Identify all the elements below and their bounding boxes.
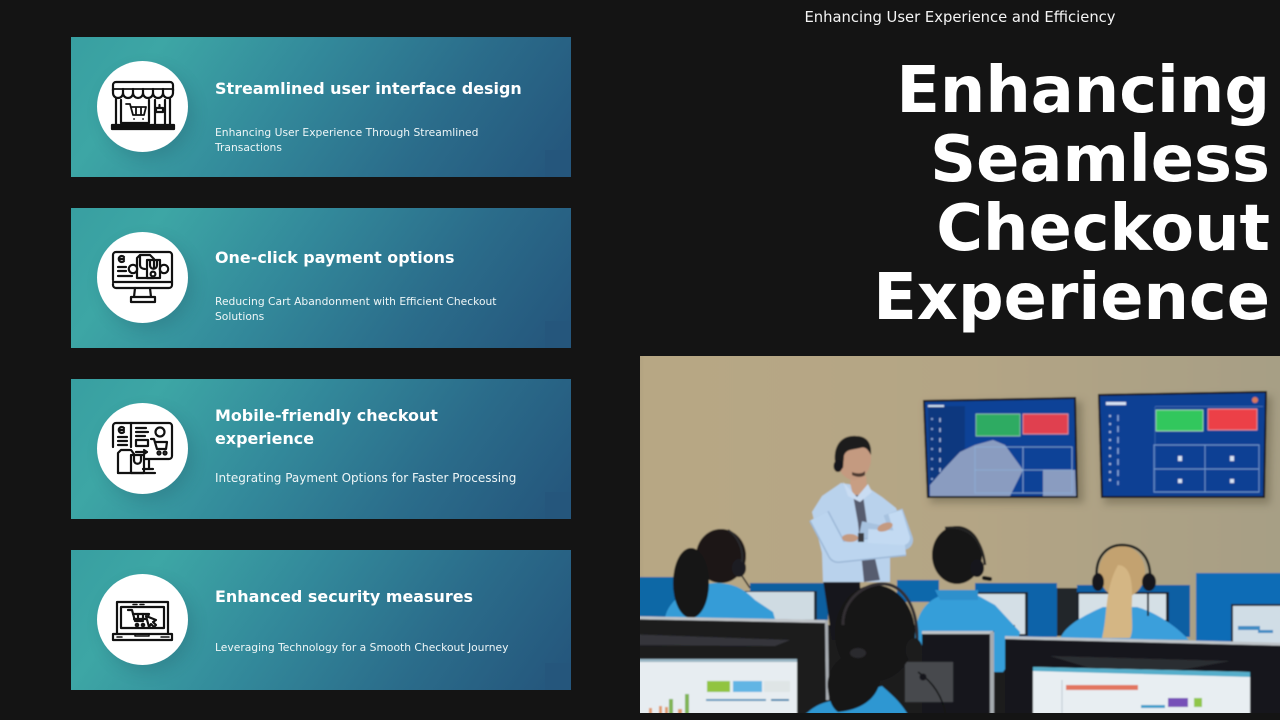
icon: storefront with cart (97, 61, 188, 152)
desk shadow area (825, 625, 1015, 720)
seated agent left (665, 529, 775, 619)
heading: One-click payment options (215, 248, 454, 267)
panel: mobile-friendly checkout experience (71, 379, 571, 519)
subtitle: Enhancing User Experience and Efficiency (804, 9, 1116, 26)
heading: Streamlined user interface design (215, 79, 522, 98)
description: Integrating Payment Options for Faster Processing (215, 471, 516, 485)
description: Leveraging Technology for a Smooth Checkout Journey (215, 641, 508, 654)
seated agent foreground (797, 584, 947, 720)
title (873, 54, 1270, 335)
title: Checkout (936, 192, 1270, 266)
heading: Mobile-friendly checkout (215, 406, 438, 425)
icon: desktop monitor with shopping bags (97, 232, 188, 323)
seated agent blonde (1060, 545, 1189, 640)
description: Enhancing User Experience Through Streamlined Transactions (215, 126, 478, 154)
seated agent centre (915, 526, 1020, 672)
heading: Enhanced security measures (215, 587, 473, 606)
panel: streamlined user interface design (71, 37, 571, 177)
description: Reducing Cart Abandonment with Efficient Checkout Solutions (215, 295, 496, 323)
panel: enhanced security measures (71, 550, 571, 690)
icon: monitor with cart and shopping bags (97, 403, 188, 494)
heading (215, 406, 438, 448)
cubicle backs and rear screens (625, 573, 1280, 646)
title: Experience (873, 261, 1270, 335)
icon: laptop with cart and cursor (97, 574, 188, 665)
panel: one-click payment options (71, 208, 571, 348)
illustration: call centre supervisor and agents at computers (640, 356, 1280, 713)
title: Enhancing (896, 54, 1270, 128)
wall screen right (1098, 391, 1272, 504)
heading: experience (215, 429, 314, 448)
title: Seamless (930, 123, 1270, 197)
desk monitors foreground (625, 616, 1280, 720)
supervisor standing (812, 436, 908, 640)
wall screen left (923, 397, 1084, 503)
